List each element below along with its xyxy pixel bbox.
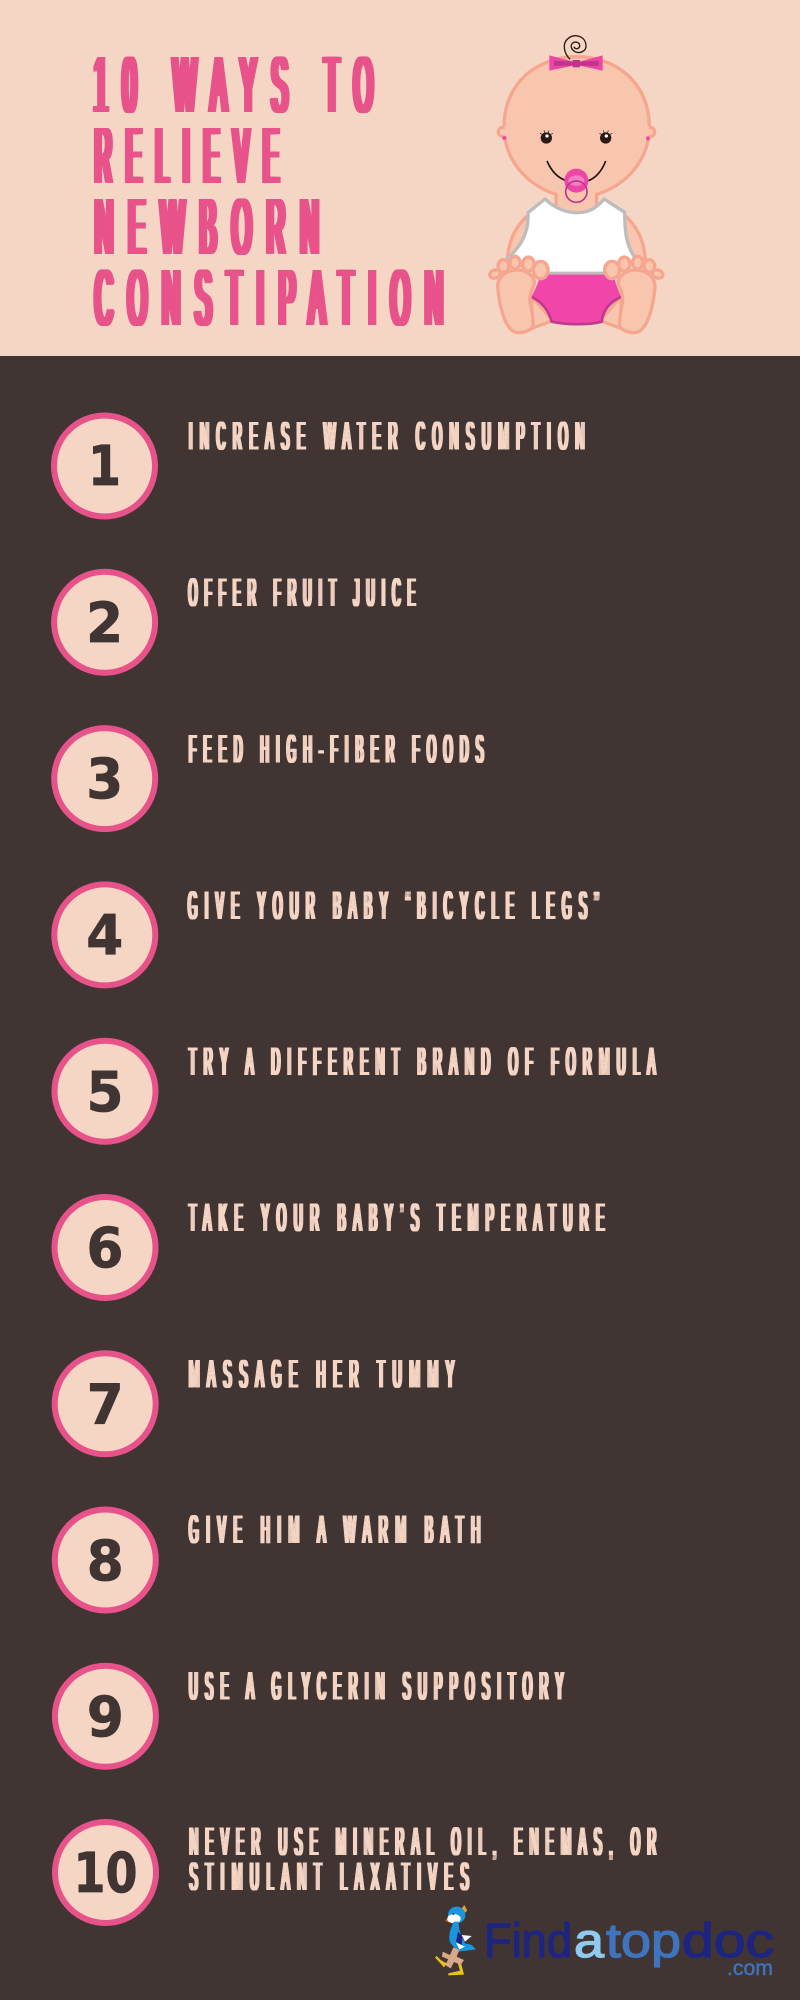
item 1	[54, 414, 592, 516]
item 3: 3	[86, 747, 123, 811]
item 4: 4	[86, 904, 123, 968]
item 2	[54, 571, 422, 673]
item 6: 6	[86, 1216, 124, 1280]
item 1: 1	[88, 434, 121, 498]
icon: baby with pacifier	[489, 36, 664, 333]
item 6	[54, 1196, 612, 1298]
item 5: 5	[86, 1060, 124, 1124]
logo: Findatopdoc: a	[574, 1915, 604, 1968]
title	[94, 40, 458, 342]
item 10	[55, 1820, 663, 1923]
item 7: 7	[87, 1372, 124, 1436]
item 9	[55, 1664, 570, 1767]
item 8: 8	[87, 1529, 124, 1593]
item 2: 2	[86, 591, 123, 655]
logo: Findatopdoc	[435, 1905, 774, 1980]
item 4	[54, 884, 606, 985]
item 8	[55, 1508, 488, 1610]
title: RELIEVE	[95, 111, 293, 200]
logo: Findatopdoc: doc	[682, 1915, 774, 1968]
logo: Findatopdoc: top	[606, 1915, 681, 1968]
item 10: 10	[74, 1841, 138, 1905]
item 9: 9	[87, 1685, 124, 1749]
logo: Findatopdoc: .com	[727, 1957, 773, 1980]
icon: stork with bandage	[435, 1905, 476, 1975]
panel: header	[0, 0, 800, 356]
item 7	[55, 1352, 461, 1454]
item 3	[54, 728, 490, 829]
item 5	[54, 1040, 662, 1142]
logo: Findatopdoc: Find	[484, 1915, 572, 1968]
